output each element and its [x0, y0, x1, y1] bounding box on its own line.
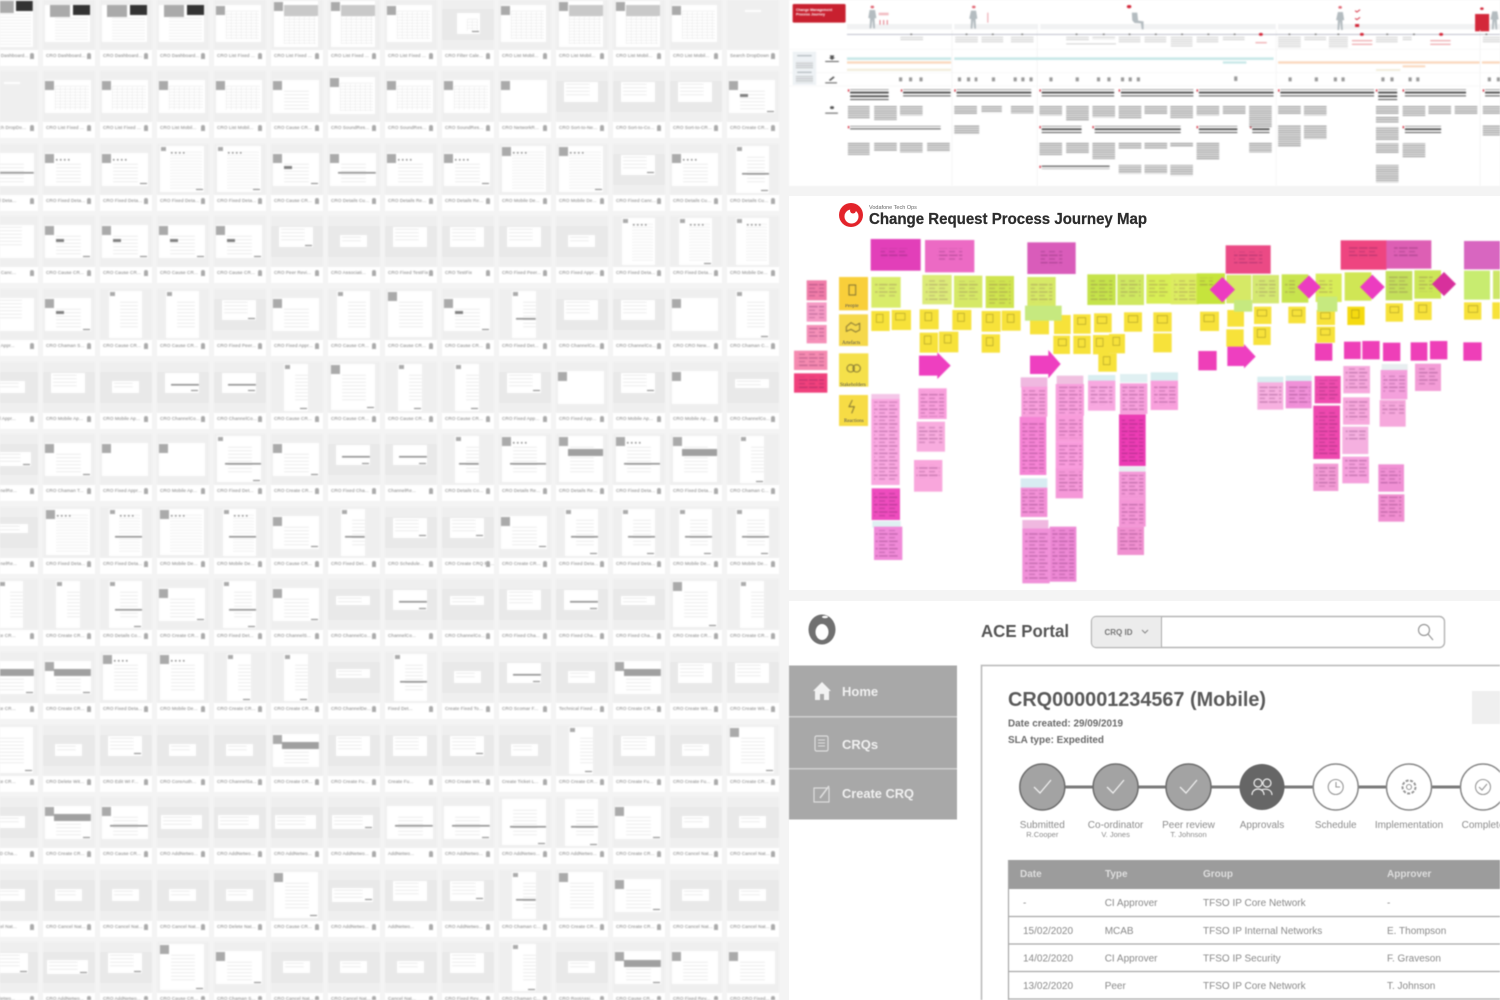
grid row 3: CRO Details Re...: [388, 198, 426, 203]
table row 2: E. Thompson: [1387, 926, 1446, 937]
handwriting on header notes: [881, 247, 1419, 266]
grid row 9: ChannelCo...: [388, 633, 416, 638]
step labels: [1020, 820, 1500, 839]
grid row 1: CRO Dashboard...: [160, 52, 199, 58]
row label captions: [840, 304, 866, 424]
grid row 8: CRO Fixed Deta...: [616, 561, 655, 566]
table header: Type: [1105, 869, 1128, 880]
completed steps: [1020, 764, 1211, 810]
grid row 4: CRO Fixed TestFix: [388, 270, 428, 275]
grid row 3: CRO Details Cu...: [331, 198, 369, 203]
grid row 13: CRO Cancel Nat...: [160, 924, 200, 929]
grid row 2: CRO SoundRes...: [331, 125, 369, 130]
grid row 7: CRO Chaman C...: [730, 488, 769, 493]
panel: sticky note journey map: [789, 196, 1500, 590]
grid row 11: CRO Edit WI F...: [103, 778, 138, 784]
nav item: Create CRQ: [814, 786, 914, 802]
vodafone logo grey: [808, 614, 836, 644]
grid row 12: CRO AddNetwo...: [160, 851, 198, 856]
grid row 5: CRO ChannelCo...: [559, 343, 599, 348]
search box: CRQ ID: [1104, 628, 1133, 637]
pink notes column 1: [871, 394, 902, 560]
grid row 9: CRO Fixed Det...: [217, 633, 254, 638]
grid row 1: CRO List Mobil...: [559, 52, 595, 58]
grid row 5: CRO Cause CR...: [103, 343, 141, 348]
pink notes column 2: [914, 388, 947, 492]
grid row 6: [0, 364, 778, 428]
grid row 2: CRO List Fixed ...: [46, 125, 84, 130]
grid row 12: CRO AddNetwo...: [217, 851, 255, 856]
grid row 12: CRO Create CR...: [46, 851, 85, 856]
nav item: CRQs: CRQs: [842, 737, 878, 752]
grid row 2: CRO Sort-to-Ne...: [559, 125, 597, 130]
green overlay notes: [1025, 297, 1337, 321]
grid row 11: CRO Create CR...: [274, 778, 313, 784]
grid row 3: CRO Details Cu...: [673, 198, 711, 203]
table row 3: 14/02/2020: [1023, 954, 1073, 964]
grid row 11: Create Fu...: [388, 778, 413, 784]
table header: Approver: [1387, 869, 1432, 880]
sidebar navigation: [789, 666, 957, 820]
table row 4: TFSO IP Core Network: [1203, 981, 1307, 992]
grid row 11: CRO Create CR...: [730, 778, 769, 784]
grid row 2: CRO Cause CR...: [274, 125, 312, 130]
grid row 2: CRO SoundRes...: [388, 125, 426, 130]
heading: journey map title: Vodafone Tech Ops: [869, 205, 917, 211]
grid row 2: CRO SoundRes...: [445, 125, 483, 130]
grid row 1: CRO List Mobil...: [616, 52, 652, 58]
grid row 13: CRO Delete Nat...: [217, 924, 256, 929]
table row 4: [1023, 981, 1435, 992]
row label captions: Stakeholders: [840, 383, 866, 388]
grid row 11: CRO CoreAuth...: [160, 778, 196, 784]
magenta small notes: [1198, 341, 1482, 370]
grid row 6: CRO Fixed App...: [559, 416, 596, 420]
step labels: Peer review: [1162, 820, 1216, 831]
grid row 10: CRO Create CR...: [274, 706, 313, 711]
grid row 1: CRO List Fixed ...: [331, 52, 369, 58]
grid row 5: CRO CRO New...: [673, 343, 710, 348]
grid row 3: CRO Mobile De...: [502, 198, 540, 203]
grid row 2: CRO Sort-to-CR...: [673, 125, 712, 130]
row label sidebar: [793, 52, 816, 85]
grid row 8: CRO Fixed Det...: [331, 561, 368, 566]
grid row 13: [0, 872, 778, 936]
grid row 10: CRO Create Wit...: [730, 706, 769, 711]
grid row 5: [0, 292, 778, 356]
journey map title text: Process Journey: [796, 12, 825, 16]
nav item: CRQs: [815, 736, 878, 752]
CRQ title: CRQ000001234567 (Mobile): [1008, 689, 1266, 711]
grid row 3: CRO Fixed Deta...: [217, 198, 256, 203]
grid row 1: CRO List Fixed ...: [274, 52, 312, 58]
grid row 10: CRO Create Wit...: [673, 706, 712, 711]
grid row 11: CRO Create Fu...: [331, 778, 368, 784]
grid row 9: CRO Create CR...: [46, 633, 85, 638]
table row 4: T. Johnson: [1387, 981, 1435, 992]
row label notes: [839, 277, 868, 426]
CRQ meta: Date created: 29/09/2019: [1008, 718, 1123, 730]
grid row 4: CRO TestFix: [445, 270, 472, 275]
grid row 11: CRO Create Wit...: [445, 778, 484, 784]
grid row 11: CRO Create CR...: [559, 778, 598, 784]
red speechmark logo: [839, 203, 863, 227]
left red notes: [794, 280, 827, 393]
grid row 6: CRO ChannelCo...: [160, 416, 200, 420]
grid row 12: CRO Create CR...: [616, 851, 655, 856]
grid row 13: CRO Cancel Nat...: [730, 924, 770, 929]
grid row 8: CRO Schedule...: [388, 561, 424, 566]
table row 3: F. Graveson: [1387, 954, 1441, 964]
grid row 4: CRO Cause CR...: [160, 270, 198, 275]
step labels: T. Johnson: [1170, 830, 1207, 839]
grid row 12: [0, 800, 778, 864]
grid row 10: Fixed Det...: [388, 706, 413, 711]
grid row 6: CRO Cause CR...: [388, 416, 426, 420]
grid row 1: CRO List Mobil...: [502, 52, 538, 58]
table header: Group: [1203, 869, 1233, 880]
grid row 4: CRO Cause CR...: [217, 270, 255, 275]
grid row 7: CRO Fixed Deta...: [616, 488, 655, 493]
grid row 7: CRO Chaman T...: [46, 488, 84, 493]
grid row 12: CRO Cancel Nat...: [673, 851, 713, 856]
grid row 6: CRO Cause CR...: [445, 416, 483, 420]
grid row 11: CRO ChannelSa...: [217, 778, 257, 784]
grid row 14: [0, 944, 778, 1000]
grid row 3: CRO Fixed Deta...: [160, 198, 199, 203]
grid row 8: CRO Fixed Deta...: [559, 561, 598, 566]
pain point details: [848, 106, 1500, 182]
grid row 9: CRO Fixed Cha...: [559, 633, 597, 638]
grid row 13: CRO Cancel Nat...: [673, 924, 713, 929]
portal screen: [788, 614, 1500, 1000]
yellow artefact notes: [871, 302, 1500, 372]
grid row 7: CRO Fixed Det...: [217, 488, 254, 493]
table row 2: 15/02/2020: [1023, 926, 1073, 937]
grid row 7: CRO Mobile Ap...: [160, 488, 197, 493]
grid row 5: CRO Fixed Appr...: [274, 343, 313, 348]
grid row 13: CRO Create CR...: [559, 924, 598, 929]
grid row 10: Create Fixed To...: [445, 706, 483, 711]
stage bands: [847, 24, 1500, 29]
heading: journey map title: Change Request Process Journey Map: [869, 211, 1147, 228]
grid row 12: CRO AddNetwo...: [502, 851, 540, 856]
grid row 7: [0, 436, 778, 500]
grid row 7: CRO Details Re...: [502, 488, 540, 493]
grid row 1: CRO Filter Cale...: [445, 52, 483, 58]
grid row 1: CRO Dashboard...: [103, 52, 142, 58]
table row 1: [1023, 898, 1390, 909]
step labels: Implementation: [1375, 820, 1443, 831]
grid row 10: CRO Create CR...: [46, 706, 85, 711]
grid row 3: CRO Fixed Canc...: [616, 198, 656, 203]
grid row 2: CRO List Mobil...: [160, 125, 196, 130]
grid row 10: CRO Create CR...: [616, 706, 655, 711]
grid row 12: CRO AddNetwo...: [559, 851, 597, 856]
approvals table: [1008, 860, 1500, 1000]
people icons row: [899, 76, 1500, 81]
table lines: [1008, 860, 1500, 1000]
table row 4: 13/02/2020: [1023, 981, 1073, 992]
grid row 1: CRO List Fixed ...: [217, 52, 255, 58]
grid row 1: [0, 0, 778, 66]
grid row 9: CRO Create CR...: [730, 633, 769, 638]
grid row 10: CRO ChannelDe...: [331, 706, 371, 711]
grid row 10: CRO Scomar F...: [502, 706, 538, 711]
grid row 9: CRO Details Co...: [103, 633, 141, 638]
grid row 9: CRO Fixed Cha...: [502, 633, 540, 638]
grid row 4: CRO Associati...: [331, 270, 366, 275]
grid row 9: CRO ChannelS...: [274, 633, 311, 638]
grid row 13: CRO Cause CR...: [274, 924, 312, 929]
grid row 7: CRO Create CR...: [274, 488, 313, 493]
grid row 6: CRO Mobile Ap...: [673, 416, 710, 420]
grid row 12: CRO Cancel Nat...: [730, 851, 770, 856]
grid row 7: CRO Fixed Cha...: [331, 488, 369, 493]
grid row 2: CRO List Fixed ...: [103, 125, 141, 130]
journey map title text: [795, 8, 833, 18]
timeline: [847, 33, 1500, 36]
grid row 10: CRO Mobile De...: [160, 706, 198, 711]
grid row 8: CRO Mobile De...: [730, 561, 768, 566]
grid row 8: CRO Mobile De...: [217, 561, 255, 566]
pink notes column 4: [1056, 376, 1084, 498]
grid row 11: CRO Create Fu...: [616, 778, 653, 784]
grid row 5: CRO Chaman S...: [46, 343, 85, 348]
grid row 5: CRO Fixed Peer...: [217, 343, 256, 348]
grid row 11: CRO Create Fu...: [673, 778, 710, 784]
grid row 6: CRO Cause CR...: [331, 416, 369, 420]
table row 1: TFSO IP Core Network: [1203, 898, 1307, 909]
grid row 5: CRO Fixed Det...: [502, 343, 539, 348]
grid row 13: CRO AddNetwo...: [331, 924, 369, 929]
grid row 5: CRO Cause CR...: [445, 343, 483, 348]
grid row 8: [0, 510, 778, 574]
progress stepper: [1020, 764, 1500, 810]
grid row 1: CRO List Fixed ...: [388, 52, 426, 58]
grid row 12: CRO AddNetwo...: [274, 851, 312, 856]
grid row 6: CRO ChannelCo...: [730, 416, 770, 420]
grid row 10: Technical Fixed ...: [559, 706, 598, 711]
grid row 4: CRO Fixed Deta...: [673, 270, 712, 275]
grid row 13: CRO Cancel Nat...: [103, 924, 143, 929]
grid row 5: CRO Cause CR...: [331, 343, 369, 348]
grid row 9: [0, 582, 778, 646]
grid row 7: CRO Fixed Deta...: [673, 488, 712, 493]
grid row 11: [0, 728, 778, 792]
pending step icons: [1328, 780, 1490, 794]
grid row 13: CRO Create CR...: [616, 924, 655, 929]
table header: [1020, 869, 1432, 880]
pain point headings: [850, 89, 1500, 169]
grid row 1: CRO List Mobil...: [673, 52, 709, 58]
dividers: [789, 30, 1500, 186]
action button: [1472, 691, 1500, 724]
nav item: Home: Home: [842, 684, 878, 699]
grid row 2: CRO Sort-to-Co...: [616, 125, 654, 130]
grid row 8: CRO Create CR...: [502, 561, 541, 566]
table row 3: TFSO IP Security: [1203, 954, 1281, 964]
magenta arrows: [919, 344, 1256, 379]
grid row 3: CRO Fixed Deta...: [46, 198, 85, 203]
red illustration accents: [871, 5, 1489, 31]
grid row 8: CRO Create CRQ Fo...: [445, 561, 494, 566]
nav item: Home: [813, 682, 878, 700]
step labels: R.Cooper: [1026, 830, 1059, 839]
grid row 4: CRO Cause CR...: [103, 270, 141, 275]
grid row 8: CRO Fixed Deta...: [46, 561, 85, 566]
grid row 5: CRO Cause CR...: [388, 343, 426, 348]
sticky notes wall: [793, 238, 1500, 584]
person illustrations: [868, 10, 1499, 30]
grid row 4: CRO Peer Revi...: [274, 270, 311, 275]
grid row 4: CRO Fixed Deta...: [616, 270, 655, 275]
grid row 9: CRO Create CR...: [160, 633, 199, 638]
grid row 13: AddNetwo...: [388, 924, 414, 929]
grid row 6: CRO Cause CR...: [274, 416, 312, 420]
grid row 12: CRO AddNetwo...: [331, 851, 369, 856]
grid row 4: CRO Cause CR...: [46, 270, 84, 275]
grid row 3: [0, 146, 778, 210]
main card: [982, 666, 1500, 1000]
grid row 12: AddNetwo...: [388, 851, 414, 856]
pending steps: [1313, 764, 1500, 810]
row label captions: People: [845, 304, 859, 309]
grid row 5: CRO ChannelCo...: [616, 343, 656, 348]
timeline step captions: [900, 36, 1500, 48]
panel: wireframe screens grid: [0, 0, 778, 1000]
grid row 10: CRO Fixed Deta...: [103, 706, 142, 711]
grid row 13: CRO Chaman C...: [502, 924, 541, 929]
panel: customer journey map: [789, 0, 1500, 186]
step labels: Submitted: [1020, 820, 1065, 831]
grid row 5: CRO Chaman C...: [730, 343, 769, 348]
grid row 8: CRO Mobile De...: [673, 561, 711, 566]
green activity notes: [871, 270, 1500, 310]
nav item: Create CRQ: Create CRQ: [842, 786, 914, 801]
grid row 8: CRO Fixed Deta...: [103, 561, 142, 566]
search box: [1092, 616, 1444, 648]
grid row 2: [0, 78, 778, 138]
step labels: Co-ordinator: [1088, 820, 1144, 831]
table row 3: [1023, 954, 1441, 964]
table row 1: CI Approver: [1105, 898, 1158, 909]
grid row 4: CRO Fixed Appr...: [559, 270, 598, 275]
grid row 7: CRO Details Re...: [559, 488, 597, 493]
grid row 2: CRO NetworkR...: [502, 125, 539, 130]
grid row 6: CRO Mobile Ap...: [616, 416, 653, 420]
grid row 2: CRO Create CR...: [730, 125, 769, 130]
table row 1: -: [1387, 898, 1390, 909]
grid row 10: CRO Create CR...: [217, 706, 256, 711]
grid row 3: CRO Details Re...: [445, 198, 483, 203]
grid row 3: CRO Fixed Deta...: [103, 198, 142, 203]
grid row 6: CRO Mobile Ap...: [103, 416, 140, 420]
grid row 13: CRO Cancel Nat...: [46, 924, 86, 929]
grid row 6: CRO Fixed App...: [502, 416, 539, 420]
journey map title text: Change Management: [796, 8, 833, 12]
row label captions: Reactions: [844, 419, 864, 424]
grid row 3: CRO Cause CR...: [274, 198, 312, 203]
step labels: Schedule: [1315, 820, 1357, 831]
journey map content: [792, 3, 1500, 184]
grid row 12: CRO AddNetwo...: [445, 851, 483, 856]
grid row 3: CRO Mobile De...: [559, 198, 597, 203]
row label captions: Artefacts: [842, 341, 860, 346]
row icons: [825, 55, 839, 114]
grid row 3: CRO Details Cu...: [730, 198, 768, 203]
grid row 6: CRO ChannelCo...: [217, 416, 257, 420]
CRQ meta: [1008, 718, 1123, 746]
grid row 11: CRO Delete Wit...: [46, 778, 84, 784]
grid row 9: CRO Create CR...: [673, 633, 712, 638]
pink notes column 3: [1020, 377, 1076, 583]
CRQ meta: SLA type: Expedited: [1008, 735, 1104, 746]
table row 4: Peer: [1105, 981, 1126, 992]
grid row 4: [0, 218, 778, 282]
table row 3: CI Approver: [1105, 954, 1158, 964]
grid row 9: CRO Fixed Cha...: [616, 633, 654, 638]
grid row 10: [0, 654, 778, 718]
red bullets: [848, 89, 1484, 168]
table row 2: [1023, 926, 1446, 937]
table row 2: MCAB: [1105, 926, 1134, 937]
magenta diamonds: [1210, 272, 1456, 302]
current step: approvals: [1240, 764, 1284, 810]
grid row 5: CRO Cause CR...: [160, 343, 198, 348]
pink notes right group: [1151, 364, 1441, 522]
grid row 1: Search DropDown: [730, 52, 769, 58]
grid row 7: CRO Details Co...: [445, 488, 483, 493]
grid row 8: CRO Cause CR...: [274, 561, 312, 566]
step labels: Approvals: [1240, 820, 1284, 831]
grid row 9: CRO ChannelCo...: [331, 633, 371, 638]
grid row 6: CRO Mobile Ap...: [46, 416, 83, 420]
grid row 4: CRO Fixed Peer...: [502, 270, 541, 275]
grid row 8: CRO Mobile De...: [160, 561, 198, 566]
grid row 9: CRO ChannelCo...: [445, 633, 485, 638]
heading: ACE Portal: ACE Portal: [981, 621, 1069, 641]
handwriting on green notes: [875, 275, 1433, 304]
grid row 11: Create Ticket L...: [502, 778, 539, 784]
table header: Date: [1020, 869, 1042, 880]
phase bands: touchpoints: [847, 57, 1500, 71]
grid row 2: CRO List Mobil...: [217, 125, 253, 130]
grid row 1: CRO Dashboard...: [46, 52, 85, 58]
grid row 4: CRO Mobile De...: [730, 270, 768, 275]
grid row 12: CRO Cause CR...: [103, 851, 141, 856]
grid row 7: CRO Fixed Appr...: [103, 488, 142, 493]
stage header notes: [871, 239, 1500, 274]
red title box: [793, 4, 846, 23]
pink notes columns 5 and 6: [1088, 374, 1147, 555]
step labels: V. Jones: [1101, 830, 1130, 839]
yellow note glyphs: [876, 305, 1478, 365]
handwriting on pink notes: [797, 283, 1439, 580]
grid row 7: ChannelRe...: [388, 488, 416, 493]
panel: ACE Portal interface: [789, 601, 1500, 1000]
grid row 13: CRO AddNetwo...: [445, 924, 483, 929]
table row 2: TFSO IP Internal Networks: [1203, 926, 1322, 937]
table row 1: -: [1023, 898, 1026, 909]
